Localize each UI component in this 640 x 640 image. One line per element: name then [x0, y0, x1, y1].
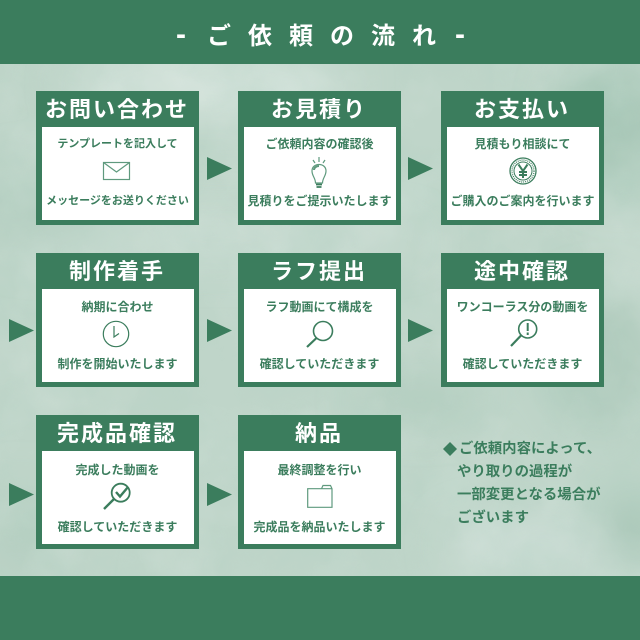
- note text: やり取りの過程が: [457, 464, 572, 480]
- icon: diamond bullet: [443, 442, 457, 456]
- text line: 確認していただきます: [58, 520, 177, 534]
- note text: ございます: [457, 510, 529, 526]
- arrow: [9, 319, 34, 342]
- heading: お見積り: [271, 97, 367, 122]
- bottom footer band: [0, 576, 640, 640]
- text line: 納期に合わせ: [81, 300, 154, 314]
- text line: 完成した動画を: [75, 462, 160, 476]
- text line: 確認していただきます: [260, 356, 379, 370]
- panel: お見積り: [238, 91, 401, 225]
- icon: magnifier with check: [103, 482, 131, 510]
- text line: テンプレートを記入して: [57, 138, 178, 150]
- arrow: [207, 319, 232, 342]
- heading: 制作着手: [69, 259, 165, 284]
- text line: メッセージをお送りください: [46, 195, 189, 207]
- note text: [443, 440, 601, 526]
- panel: お支払い: [441, 91, 604, 225]
- panel: ラフ提出: [238, 253, 401, 387]
- text line: 確認していただきます: [463, 356, 582, 370]
- arrow: [408, 157, 433, 180]
- text line: ラフ動画にて構成を: [265, 300, 374, 314]
- panel: 制作着手: [36, 253, 199, 387]
- arrow: [9, 483, 34, 506]
- icon: clock: [102, 320, 130, 348]
- top header band: [0, 0, 640, 64]
- text line: 見積りをご提示いたします: [247, 194, 392, 208]
- icon: envelope: [102, 162, 130, 180]
- text line: ご依頼内容の確認後: [265, 137, 374, 151]
- icon: magnifier with exclamation: [510, 319, 538, 347]
- arrow: [408, 319, 433, 342]
- arrow: [207, 157, 232, 180]
- heading: お問い合わせ: [45, 97, 189, 122]
- heading: ラフ提出: [271, 259, 367, 284]
- icon: magnifier: [306, 320, 334, 348]
- panel: 途中確認: [441, 253, 604, 387]
- heading: 完成品確認: [57, 421, 177, 446]
- heading: お支払い: [474, 97, 570, 122]
- text line: ご購入のご案内を行います: [450, 194, 594, 208]
- panel: お問い合わせ: [36, 91, 199, 225]
- title: - ご依頼の流れ-: [176, 18, 465, 51]
- text line: 見積もり相談にて: [474, 137, 570, 151]
- text line: 完成品を納品いたします: [253, 520, 386, 534]
- note text: 一部変更となる場合が: [457, 487, 600, 503]
- text line: ワンコーラス分の動画を: [457, 300, 588, 314]
- icon: light bulb: [311, 157, 327, 188]
- text line: 制作を開始いたします: [57, 356, 178, 370]
- icon: yen coin: [509, 157, 537, 185]
- heading: 納品: [295, 421, 343, 446]
- panel: 完成品確認: [36, 415, 199, 549]
- icon: folder: [307, 484, 333, 508]
- note text: ご依頼内容によって、: [459, 441, 601, 457]
- arrow: [207, 483, 232, 506]
- text line: 最終調整を行い: [277, 462, 362, 476]
- heading: 途中確認: [474, 259, 570, 284]
- panel: 納品: [238, 415, 401, 549]
